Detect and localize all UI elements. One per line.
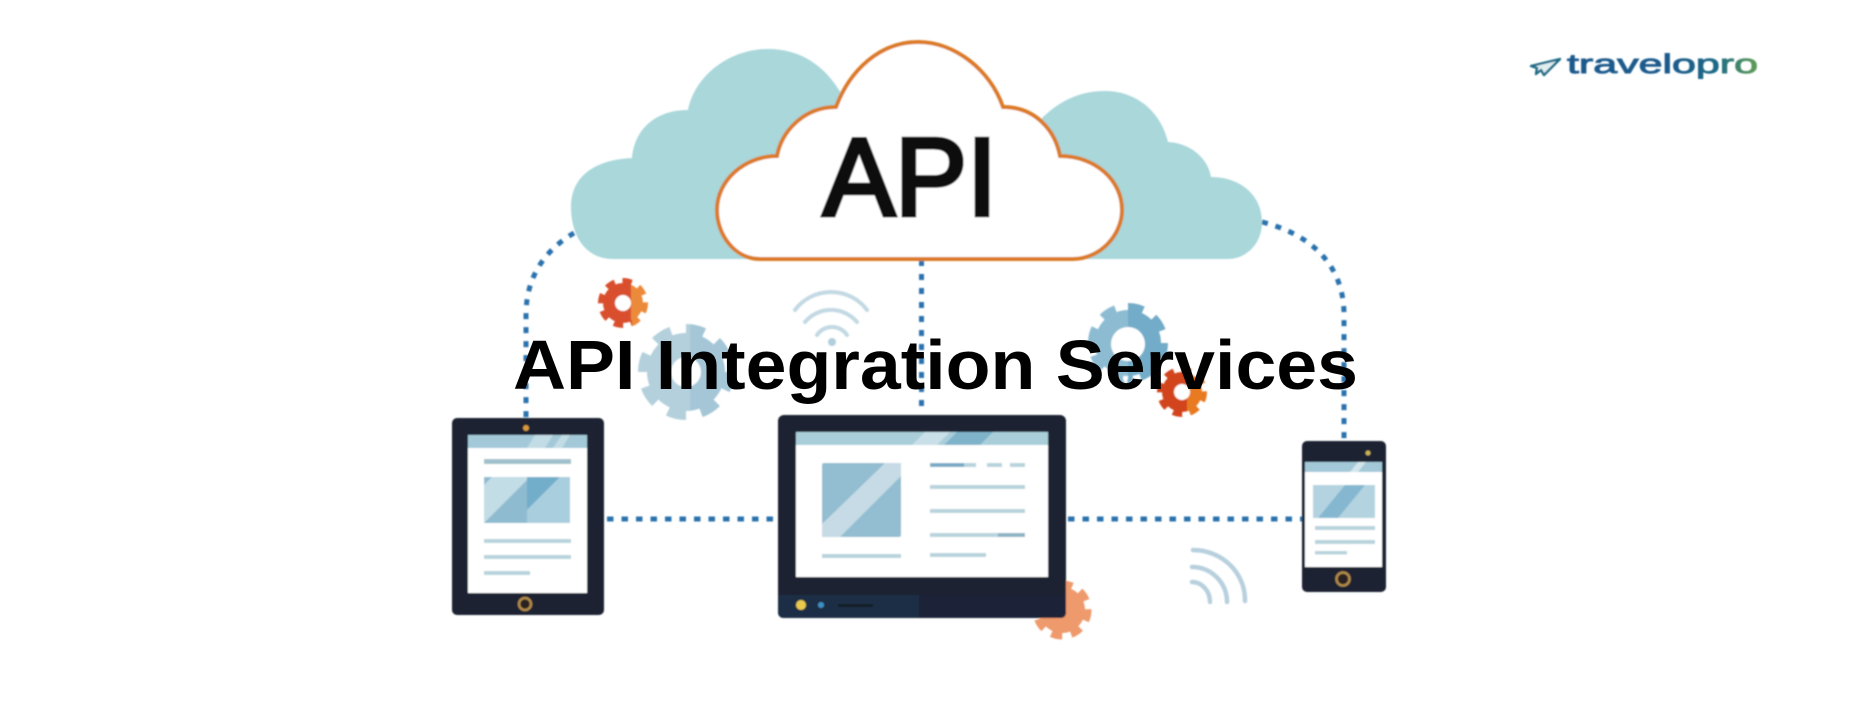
dotted connector: API cloud to laptop — [919, 260, 924, 410]
tablet home button — [519, 598, 531, 610]
logo wordmark: travelopro — [1567, 49, 1758, 79]
wifi signal bottom — [1192, 550, 1245, 602]
cloud label: API: API — [823, 116, 997, 239]
phone image block — [1313, 485, 1375, 518]
dotted connector: left cloud to tablet — [526, 233, 574, 418]
gear: orange below laptop — [1036, 584, 1088, 636]
phone home button — [1336, 572, 1350, 586]
gear: large pale blue — [644, 330, 728, 414]
laptop indicator lights — [796, 600, 873, 610]
laptop caption line — [822, 554, 901, 558]
tablet text line — [484, 459, 571, 464]
title: API Integration Services — [513, 326, 1358, 404]
dotted connector: right cloud to phone — [1262, 222, 1344, 441]
phone text lines — [1315, 526, 1375, 554]
cloud: teal left — [571, 49, 842, 259]
cloud: teal right — [1040, 91, 1262, 259]
gear: small orange-red top left — [601, 281, 645, 325]
laptop text lines — [930, 463, 1025, 557]
phone header band — [1305, 462, 1382, 472]
logo: travelopro — [1531, 49, 1758, 79]
logo paper plane icon — [1531, 59, 1560, 75]
gear: blue right — [1093, 308, 1163, 378]
device: tablet — [452, 418, 604, 615]
tablet header band — [468, 435, 587, 448]
dotted connector: laptop to phone — [1068, 516, 1302, 522]
device: laptop — [778, 415, 1066, 618]
illustration — [452, 42, 1386, 636]
phone camera — [1366, 450, 1370, 456]
gear: small red right — [1160, 370, 1204, 414]
laptop header band — [796, 432, 1048, 445]
dotted connector: tablet to laptop — [607, 516, 778, 522]
cloud: white API cloud — [717, 42, 1122, 259]
laptop image block — [822, 463, 901, 537]
device: phone — [1302, 441, 1386, 592]
tablet image block — [484, 477, 570, 523]
tablet text lines — [484, 539, 571, 575]
wifi signal top — [795, 292, 867, 346]
tablet camera — [523, 425, 529, 431]
